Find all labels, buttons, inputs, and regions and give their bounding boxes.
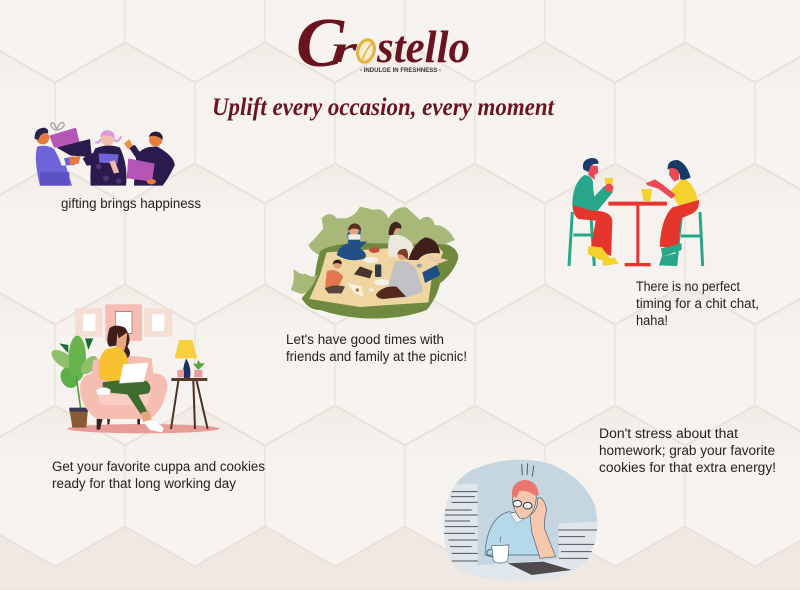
caption: working day: ready for that long working day <box>52 476 236 491</box>
caption: homework: Don't stress about that <box>599 426 738 441</box>
panel: working from home <box>48 304 265 491</box>
logo: Crostello: - INDULGE IN FRESHNESS - <box>360 68 441 74</box>
illustration: tired student among paper stacks <box>442 460 602 582</box>
caption: chit chat: There is no perfect <box>636 279 740 294</box>
caption: working day <box>52 459 265 491</box>
illustration: woman working on a laptop in an armchair <box>48 304 219 433</box>
logo: Crostello: r <box>331 29 359 71</box>
caption: homework: cookies for that extra energy! <box>599 460 776 475</box>
logo: Crostello: stello <box>376 21 470 72</box>
caption: chit chat: timing for a chit chat, <box>636 296 759 311</box>
caption: picnic <box>286 332 467 364</box>
caption: picnic: Let's have good times with <box>286 332 444 347</box>
panel: picnic <box>286 207 467 364</box>
panel: chit chat <box>569 158 759 328</box>
logo: Crostello: C <box>296 5 345 82</box>
caption: homework: homework; grab your favorite <box>599 443 775 458</box>
title: Uplift every occasion, every moment <box>212 94 555 121</box>
illustration: two friends talking at a table <box>569 158 703 266</box>
logo: Crostello <box>296 5 470 82</box>
caption: homework <box>599 426 776 475</box>
illustration: family picnic on a blanket <box>291 207 458 319</box>
caption: chit chat <box>636 279 759 328</box>
panel: homework stress <box>442 426 776 582</box>
caption: working day: Get your favorite cuppa and cookies <box>52 459 265 474</box>
panel: gifting <box>35 122 201 211</box>
caption: chit chat: haha! <box>636 313 668 328</box>
caption: gifting: gifting brings happiness <box>61 196 201 211</box>
illustration: three people exchanging gifts <box>35 122 175 186</box>
caption: picnic: friends and family at the picnic! <box>286 349 467 364</box>
